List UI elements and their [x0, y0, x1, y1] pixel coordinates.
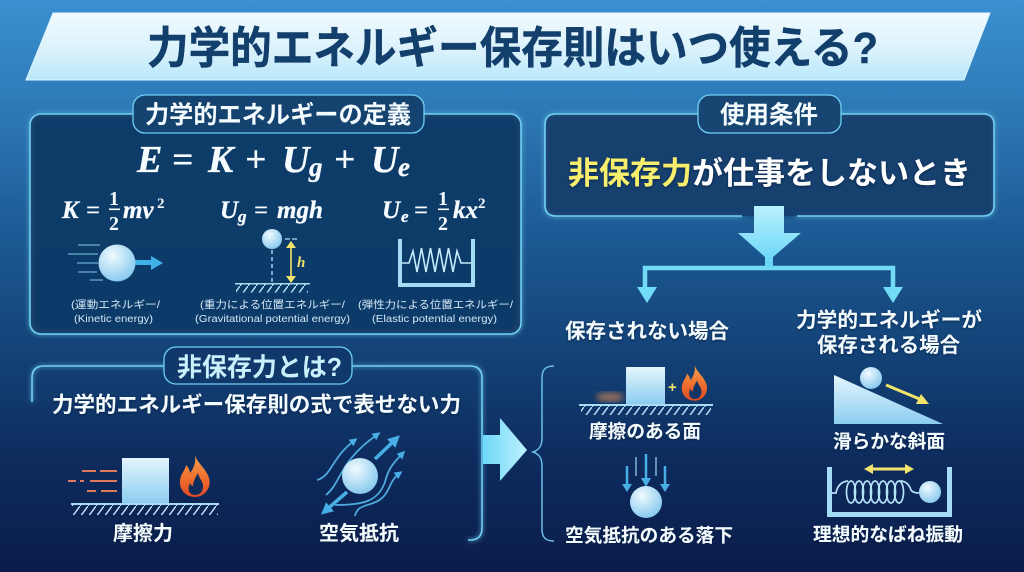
- example: friction surface: [579, 365, 713, 442]
- captions: elastic energy: (Elastic potential energy): [372, 313, 497, 325]
- main formula: U: [371, 139, 401, 181]
- main formula: e: [398, 152, 410, 182]
- title banner: [26, 13, 990, 80]
- heading: definition: 力学的エネルギーの定義: [145, 101, 411, 129]
- heading: conserved: [796, 308, 983, 357]
- arrow: branch to two cases: [637, 268, 903, 303]
- captions: kinetic energy: (運動エネルギー/: [71, 298, 160, 311]
- formula: elastic energy: 2: [478, 196, 486, 212]
- main formula: =: [172, 139, 194, 181]
- formula: elastic energy: 2: [438, 213, 448, 235]
- icon: ball at height: h: [297, 255, 305, 271]
- formula: elastic energy: 1: [438, 188, 448, 210]
- formula: kinetic energy: 2: [109, 213, 119, 235]
- heading: usage condition: [698, 95, 841, 133]
- heading: definition: [133, 95, 424, 133]
- formula: gravitational energy: U: [220, 197, 240, 224]
- formula: elastic energy: =: [414, 197, 428, 224]
- icon: moving ball: [68, 244, 163, 282]
- main formula: U: [282, 139, 312, 181]
- icon: air resistance: [317, 434, 403, 516]
- formula: kinetic energy: K: [61, 197, 81, 224]
- icon: spring in box: [400, 239, 473, 285]
- main formula: +: [245, 139, 267, 181]
- main formula: +: [334, 139, 356, 181]
- label: friction: 摩擦力: [113, 522, 173, 545]
- example: smooth slope: 滑らかな斜面: [833, 431, 945, 452]
- main formula: g: [308, 152, 322, 182]
- example: friction surface: +: [668, 379, 677, 396]
- captions: elastic energy: [358, 298, 513, 325]
- heading: what is non-conservative force: 非保存力とは?: [177, 354, 342, 382]
- formula: elastic energy: e: [401, 207, 409, 226]
- label: air resistance: 空気抵抗: [319, 522, 399, 545]
- main formula: [136, 139, 410, 182]
- example: ideal spring oscillation: [813, 464, 963, 545]
- heading: conserved: 保存される場合: [817, 334, 960, 357]
- formula: gravitational energy: g: [237, 207, 247, 226]
- main formula: K: [207, 139, 236, 181]
- formula: kinetic energy: 1: [109, 188, 119, 210]
- captions: gravitational energy: (Gravitational potential energy): [195, 313, 350, 325]
- formula: elastic energy: [382, 188, 486, 235]
- arrow: to examples: [483, 418, 527, 481]
- panel: usage condition: [545, 95, 994, 216]
- captions: gravitational energy: [195, 298, 350, 325]
- formula: gravitational energy: =: [254, 197, 268, 224]
- formula: gravitational energy: mgh: [277, 197, 323, 224]
- brace: [533, 366, 554, 541]
- heading: usage condition: 使用条件: [720, 101, 818, 129]
- formula: kinetic energy: [61, 188, 164, 235]
- heading: what is non-conservative force: [164, 347, 352, 384]
- heading: conserved: 力学的エネルギーが: [796, 308, 983, 332]
- formula: elastic energy: kx: [453, 197, 478, 224]
- heading: not conserved: 保存されない場合: [565, 320, 729, 343]
- example: ideal spring oscillation: 理想的なばね振動: [813, 524, 963, 545]
- example: falling with air resistance: [565, 454, 733, 546]
- example: friction surface: 摩擦のある面: [589, 421, 701, 442]
- formula: kinetic energy: mv: [123, 197, 154, 224]
- icon: ball at height: [235, 229, 310, 292]
- captions: kinetic energy: [71, 298, 160, 325]
- arrow: down from condition: [738, 206, 801, 268]
- example: falling with air resistance: 空気抵抗のある落下: [565, 525, 733, 546]
- condition text: 非保存力が仕事をしないとき: [568, 156, 971, 191]
- captions: kinetic energy: (Kinetic energy): [74, 313, 153, 325]
- formula: gravitational energy: [220, 197, 323, 226]
- formula: kinetic energy: =: [86, 197, 100, 224]
- title banner: 力学的エネルギー保存則はいつ使える?: [147, 24, 878, 73]
- formula: kinetic energy: 2: [157, 196, 164, 212]
- panel: definition of mechanical energy: [30, 95, 521, 334]
- panel: non-conservative force: [32, 347, 482, 545]
- captions: elastic energy: (弾性力による位置エネルギー/: [358, 298, 513, 311]
- captions: gravitational energy: (重力による位置エネルギー/: [200, 298, 345, 311]
- example: smooth slope: [833, 367, 945, 452]
- formula: elastic energy: U: [382, 197, 402, 224]
- main formula: E: [136, 139, 162, 181]
- icon: friction: [68, 455, 219, 515]
- description: 力学的エネルギー保存則の式で表せない力: [52, 393, 461, 417]
